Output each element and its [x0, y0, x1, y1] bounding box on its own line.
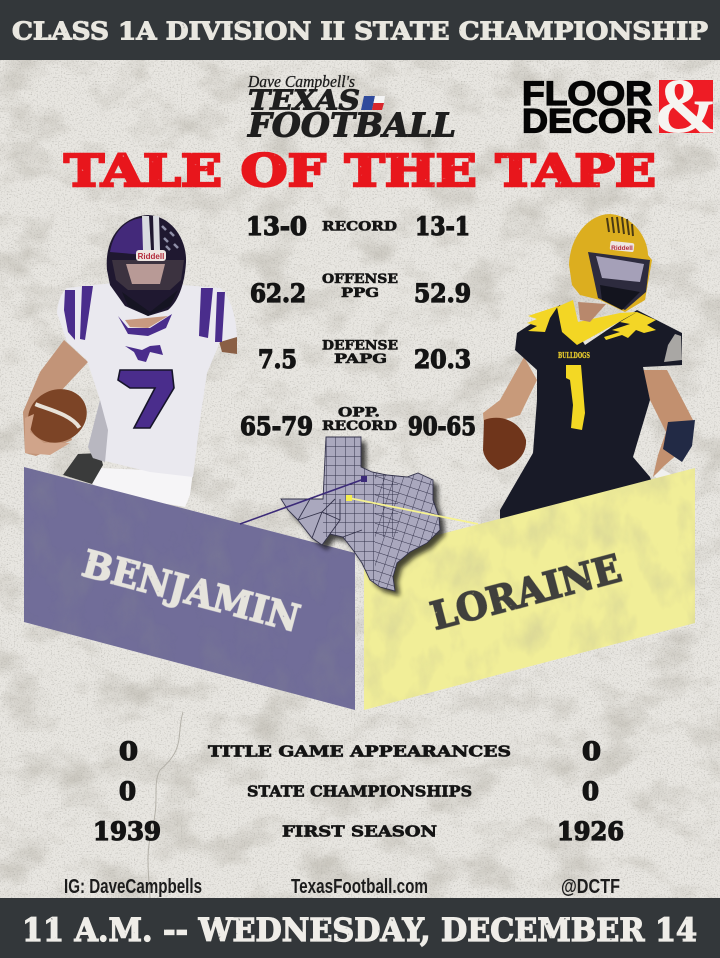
- player photo: Benjamin no. 7: [19, 215, 237, 507]
- stat: offense ppg: [250, 272, 471, 308]
- team name: BENJAMIN: [78, 541, 305, 641]
- stat: opponent record: RECORD: [322, 419, 397, 434]
- wrist tape: [654, 469, 671, 482]
- stat: opponent record: OPP.: [338, 406, 380, 420]
- helmet visor and face: [112, 260, 184, 290]
- football: [483, 418, 526, 470]
- row: title game appearances: TITLE GAME APPEARANCES: [208, 742, 511, 760]
- stat: opponent record: 65-79: [240, 412, 313, 441]
- row: state championships: [119, 777, 599, 806]
- logo: Texas Football: [247, 72, 456, 144]
- number 1: [566, 365, 585, 430]
- helmet bumper: Riddell: [610, 241, 634, 252]
- website: TexasFootball.com: [291, 876, 428, 898]
- twitter handle: @DCTF: [561, 876, 620, 898]
- stat: offense ppg: 52.9: [414, 279, 471, 308]
- stat: defense papg: PAPG: [334, 352, 387, 367]
- stat: opponent record: [240, 406, 476, 441]
- helmet bumper: Riddell: [136, 250, 166, 261]
- logo: Texas Football: TEXAS: [248, 86, 360, 116]
- row: first season: 1939: [93, 817, 161, 846]
- stat: record: 13-1: [415, 212, 470, 241]
- stat: record: RECORD: [322, 220, 397, 234]
- logo: Texas Football: FOOTBALL: [247, 106, 456, 144]
- stat: record: [246, 212, 470, 241]
- stat: offense ppg: 62.2: [250, 279, 306, 308]
- row: first season: [93, 817, 624, 846]
- collar: [118, 314, 172, 336]
- stat: defense papg: 7.5: [258, 345, 297, 374]
- row: title game appearances: 0: [119, 737, 138, 766]
- pointer: Benjamin location: [240, 476, 367, 524]
- player photo: Loraine no. 1: Riddell: [611, 245, 633, 252]
- footer social links: [64, 876, 620, 898]
- row: title game appearances: 0: [582, 737, 601, 766]
- stat: defense papg: 20.3: [414, 345, 471, 374]
- top banner: [0, 0, 720, 60]
- sleeve patch: [664, 334, 682, 362]
- helmet: [107, 215, 186, 316]
- jersey: [500, 305, 682, 525]
- logo: Floor & Decor: FLOOR: [522, 75, 652, 113]
- helmet: [569, 214, 652, 312]
- stat: offense ppg: OFFENSE: [322, 272, 398, 287]
- icon: red ampersand square: &: [654, 62, 718, 149]
- icon: Texas flag: [361, 96, 385, 110]
- row: state championships: 0: [119, 777, 136, 806]
- helmet visor: [588, 252, 650, 310]
- map: Texas counties: [275, 430, 445, 596]
- chest wordmark: BULLDOGS: [558, 351, 590, 361]
- row: state championships: STATE CHAMPIONSHIPS: [247, 782, 472, 800]
- row: first season: FIRST SEASON: [282, 822, 437, 840]
- title: Tale of the Tape: TALE OF THE TAPE: [64, 146, 656, 197]
- pants: [92, 468, 193, 507]
- banner title: CLASS 1A DIVISION II STATE CHAMPIONSHIP: [12, 16, 708, 46]
- history table: [93, 737, 624, 846]
- logo: Texas Football: Dave Campbell's: [247, 72, 355, 91]
- stat: record: 13-0: [246, 212, 307, 241]
- player photo: Loraine no. 1: [483, 214, 695, 525]
- stat: offense ppg: PPG: [341, 286, 379, 301]
- panel: Loraine: [364, 468, 695, 710]
- stat: defense papg: DEFENSE: [322, 338, 398, 354]
- stat rows: centre comparison: [240, 212, 476, 441]
- sleeve stripes: [64, 286, 225, 342]
- row: first season: 1926: [557, 817, 624, 846]
- jersey: [57, 283, 237, 477]
- facemask: [122, 290, 178, 316]
- pointer: Loraine location: [346, 495, 478, 524]
- football: [19, 380, 96, 452]
- logo: Floor & Decor: DECOR: [522, 102, 652, 140]
- panel: Benjamin: [24, 467, 355, 710]
- row: title game appearances: [119, 737, 601, 766]
- mustang logo: [125, 345, 163, 362]
- row: state championships: 0: [582, 777, 599, 806]
- helmet star pattern: [162, 226, 178, 250]
- glove: [63, 453, 103, 484]
- stat: opponent record: 90-65: [408, 412, 476, 441]
- running arm: [23, 340, 88, 456]
- team name: LORAINE: [426, 545, 626, 639]
- arm: [483, 357, 537, 425]
- stat: defense papg: [258, 338, 471, 374]
- hand: [25, 414, 70, 455]
- number 7: [118, 370, 174, 428]
- bottom banner: [0, 898, 720, 958]
- helmet mask and chin: [600, 285, 640, 310]
- player photo: Benjamin no. 7: Riddell: [138, 252, 164, 261]
- wristband: [663, 420, 695, 462]
- instagram handle: IG: DaveCampbells: [64, 876, 202, 898]
- game time: 11 A.M. -- WEDNESDAY, DECEMBER 14: [22, 911, 697, 949]
- far arm: [218, 337, 237, 354]
- shoulder lightning: [527, 306, 656, 340]
- collar: [557, 300, 637, 345]
- logo: Floor & Decor: [522, 62, 718, 149]
- helmet ridge pattern: [607, 217, 633, 236]
